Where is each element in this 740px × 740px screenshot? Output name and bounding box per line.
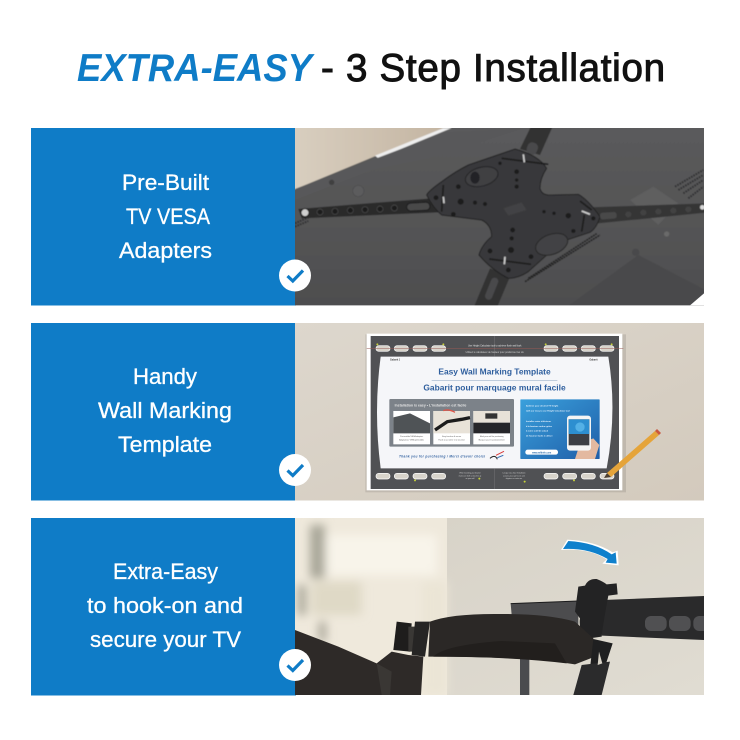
panel: step 3 <box>31 518 710 696</box>
step 2 photo: wall with template <box>295 323 704 500</box>
wall marking template sheet: Use Height Calculator tool to achieve flush wall look <box>468 344 522 347</box>
adapter arm holes <box>317 205 397 215</box>
arm <box>428 614 595 664</box>
step 1 blue label: TV VESA <box>126 204 210 229</box>
template ad box: Installez votre téléviseur <box>526 420 551 423</box>
step 3 blue label: to hook-on and <box>87 593 243 618</box>
template ad box: Achieve your desired TV height <box>526 404 559 407</box>
title: - 3 Step Installation <box>321 47 665 90</box>
step 1 photo: TV back with VESA adapter <box>292 125 708 308</box>
adapter plate <box>427 149 600 278</box>
wall marking template sheet: on your wall <box>466 478 475 480</box>
step 3 blue label: secure your TV <box>90 627 241 652</box>
template install steps box: Adaptateurs VESA préinstallés <box>399 439 424 442</box>
step 3 blue label <box>31 518 296 696</box>
wall marking template sheet: Thank you for purchasing / Merci d'avoir choisi <box>399 454 485 458</box>
step 2 blue label: Handy <box>133 364 197 389</box>
wall marking template sheet <box>365 334 626 492</box>
wall marking template sheet: Gabarit pour marquage mural facile <box>423 383 566 392</box>
template install steps box: Easy hook-on & secure <box>442 436 461 438</box>
wall marking template sheet: Gabarit 1 <box>390 359 401 362</box>
template install steps box: Installation is easy • L'installation est facile <box>395 404 466 408</box>
template heading: Easy Wall Marking Template <box>438 368 551 377</box>
template install steps box: Pre-installed VESA adapters <box>400 435 423 438</box>
template install steps box: Marquez pour le positionnement <box>479 439 505 442</box>
step 2 blue label: Template <box>118 432 212 457</box>
template install steps box: Mark your wall for positioning <box>480 435 504 438</box>
check badge 1 <box>279 260 311 292</box>
step 3 photo: arm hooking onto wall plate <box>295 518 710 695</box>
template ad box <box>520 399 600 459</box>
step 3 blue label: Extra-Easy <box>113 559 218 584</box>
template ad box: à la hauteur voulue grâce <box>526 425 553 428</box>
template ad box: à notre outil de calcul <box>526 430 549 433</box>
panel: step 1 <box>31 125 708 308</box>
vertical adapter arm <box>520 128 552 155</box>
wall marking template sheet: make sure both screws line up <box>459 474 481 477</box>
wall marking template sheet: Utilisez le calculateur de hauteur pour positionner les vis <box>466 351 525 354</box>
step 2 blue label <box>31 323 296 500</box>
wall marking template sheet: alignées sur votre mur <box>506 477 523 480</box>
horizontal adapter arm <box>298 198 438 218</box>
wall marking template sheet: Gabarit <box>589 359 598 362</box>
icon: pencil on wall <box>604 429 661 478</box>
tv back plate <box>510 602 578 625</box>
template ad box: with our easy to use Height Calculator tool <box>526 409 570 412</box>
wall rail <box>602 596 704 640</box>
template install steps box <box>389 399 514 447</box>
template ad box: www.mfiinfo.com <box>532 452 551 454</box>
step 1 blue label <box>31 128 296 306</box>
panel: step 2 <box>31 323 704 500</box>
check badge 3 <box>279 649 311 681</box>
wall marking template sheet: When mounting your bracket <box>459 472 481 475</box>
template ad box: de hauteur facile à utiliser <box>526 434 553 437</box>
template slots <box>376 346 614 479</box>
wall marking template sheet: assurez-vous que les vis sont <box>503 474 525 477</box>
wall marking template sheet: Lorsque vous fixez l'installation <box>503 472 525 475</box>
template install steps box: Facile à accrocher et à sécuriser <box>438 439 465 442</box>
hook <box>575 579 618 639</box>
step 2 blue label: Wall Marking <box>98 398 232 423</box>
title <box>77 47 665 90</box>
step 1 blue label: Pre-Built <box>122 170 209 195</box>
title: EXTRA-EASY <box>77 47 315 90</box>
check badge 2 <box>279 454 311 486</box>
step 1 blue label: Adapters <box>119 238 212 263</box>
arrow <box>561 540 619 565</box>
